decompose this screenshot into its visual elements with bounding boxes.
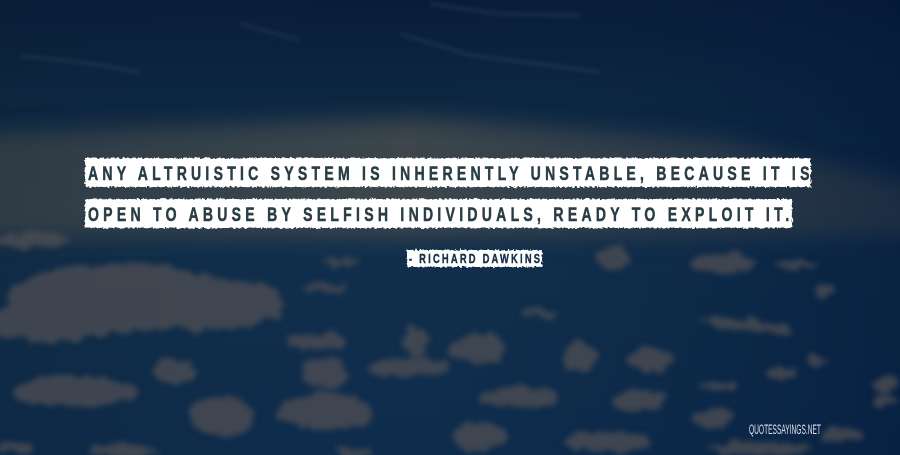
clouds: [0, 233, 897, 455]
scattered clouds: [0, 233, 897, 455]
author attribution: - RICHARD DAWKINS: [409, 253, 540, 266]
quote line 1: ANY ALTRUISTIC SYSTEM IS INHERENTLY UNSTABLE, BECAUSE IT IS: [88, 163, 809, 185]
watermark: QUOTESSAYINGS.NET: [749, 423, 821, 438]
large cloud bank, left: [0, 264, 283, 342]
quote line 2: OPEN TO ABUSE BY SELFISH INDIVIDUALS, READY TO EXPLOIT IT.: [88, 204, 789, 226]
